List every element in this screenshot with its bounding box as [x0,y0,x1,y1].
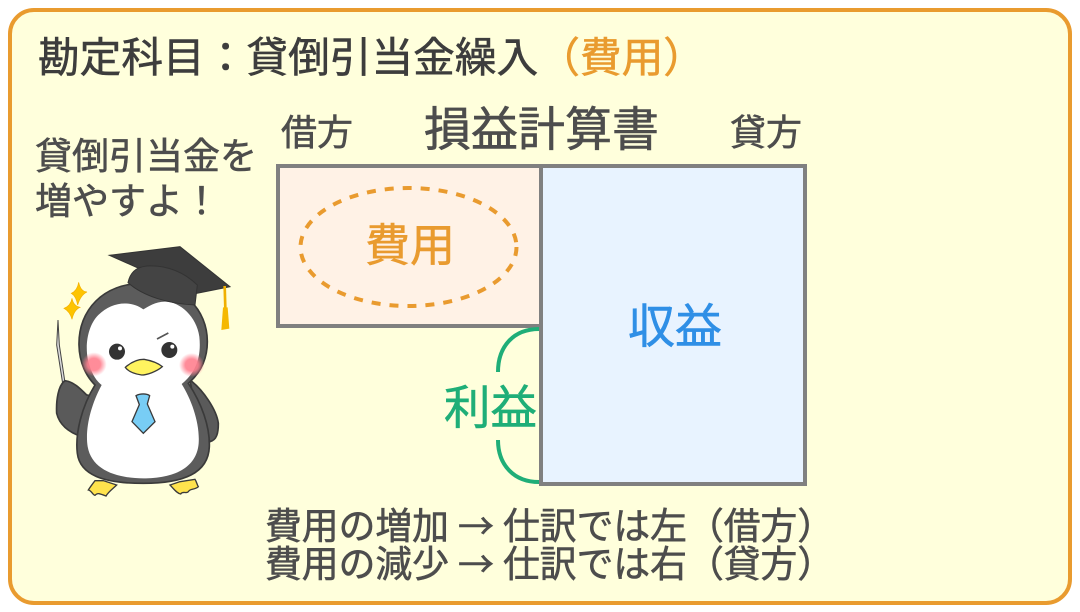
speech text: 増やすよ！ [35,171,220,225]
label: expenses: 費用 [365,209,455,274]
box: expenses [278,166,541,326]
box: revenue [541,166,805,484]
body [77,283,209,483]
speech text: 貸倒引当金を [35,126,257,180]
blush [81,352,107,376]
dashed ellipse [300,188,516,306]
necktie [132,394,155,433]
label: debit: 借方 [281,104,353,156]
tassel [221,286,229,308]
note: decrease: → [458,536,494,588]
label: revenue: 収益 [628,288,722,357]
brace: profit [498,329,539,482]
beak [125,359,162,375]
eyes [109,344,125,360]
title: 勘定科目：貸倒引当金繰入（費用） [38,25,705,85]
speech text [35,126,257,225]
belly and face [87,302,200,478]
heading: income statement: 損益計算書 [424,91,659,160]
note: decrease: 費用の減少 仕訳では右（貸方） [265,534,834,588]
raised flipper [57,381,97,437]
icon: penguin mascot [56,246,231,497]
right flipper [190,380,218,442]
pointer stick [57,320,65,383]
note: increase: 費用の増加 仕訳では左（借方） [265,496,834,550]
label: credit: 貸方 [730,104,802,156]
eyebrow [157,333,168,339]
feet [88,481,117,496]
note: increase: → [458,498,494,550]
graduation cap [109,247,230,293]
label: profit: 利益 [444,371,537,438]
sparkles [64,282,87,319]
